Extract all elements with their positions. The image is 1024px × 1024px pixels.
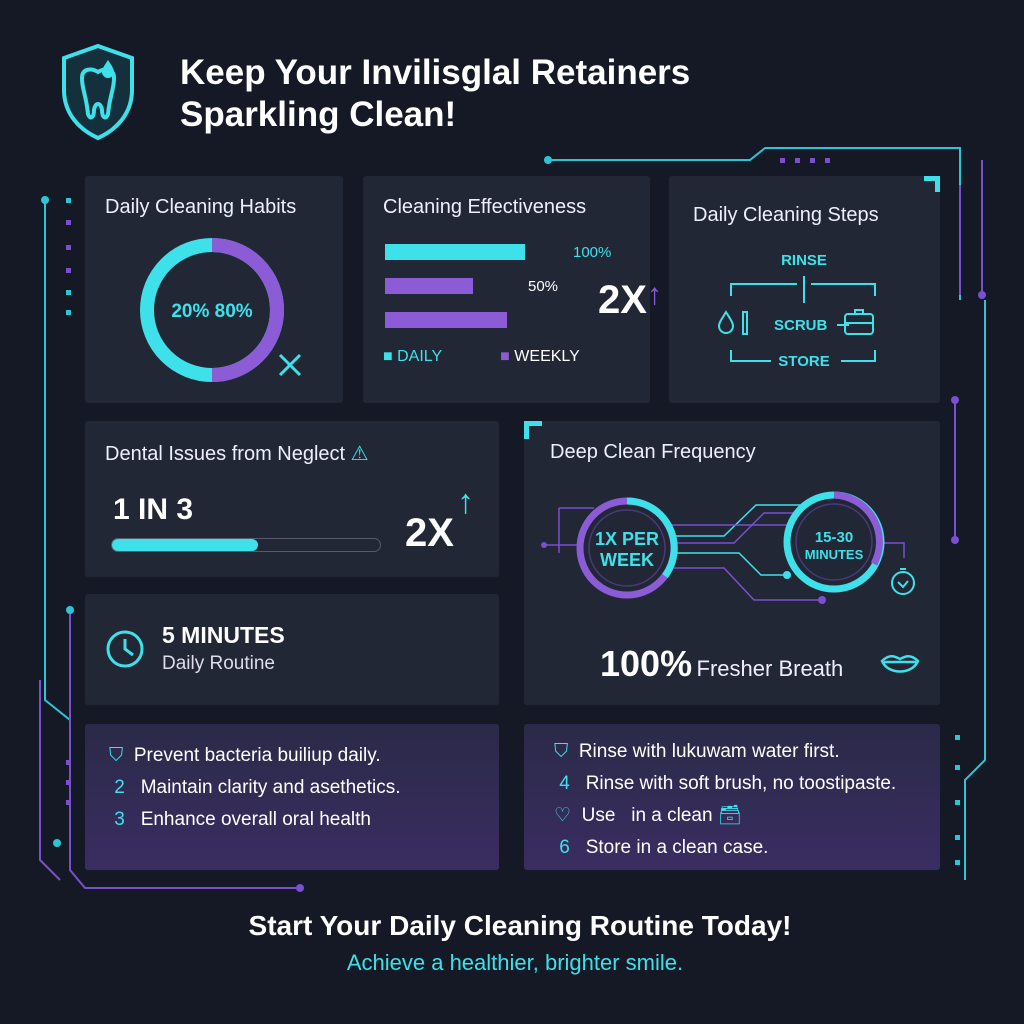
- footer headline: Start Your Daily Cleaning Routine Today!: [249, 910, 791, 941]
- panel: daily cleaning steps: Daily Cleaning Steps: [693, 204, 879, 226]
- panel: steps list: ⛉ Rinse with lukuwam water first.: [554, 741, 840, 762]
- panel: daily cleaning habits: [85, 176, 343, 403]
- donut chart: [140, 238, 284, 382]
- icon: shield tooth: [62, 44, 134, 140]
- rings chart: MINUTES: [805, 547, 864, 562]
- panel: benefits list: 3 Enhance overall oral health: [114, 809, 371, 830]
- panel: daily cleaning habits: Daily Cleaning Habits: [105, 196, 296, 218]
- bar chart: [385, 244, 611, 328]
- panel: dental issues: Dental Issues from Neglect ⚠: [105, 443, 369, 465]
- steps diagram: [718, 252, 876, 370]
- rings chart: [541, 492, 915, 604]
- panel: benefits list: 2 Maintain clarity and asethetics.: [114, 777, 400, 798]
- panel: cleaning effectiveness: Cleaning Effectiveness: [383, 196, 586, 218]
- icon: x: [279, 354, 301, 376]
- panel: steps list: ♡ Use in a clean 🗃: [554, 805, 742, 826]
- panel: benefits list: [85, 724, 499, 870]
- panel: 5 minutes: 5 MINUTES: [162, 622, 285, 648]
- footer subline: Achieve a healthier, brighter smile.: [347, 950, 683, 975]
- title: [180, 53, 690, 134]
- 2x stat: 2X↑: [598, 278, 662, 322]
- panel: 5 minutes: Daily Routine: [162, 653, 275, 674]
- arrow up: ↑: [457, 483, 474, 521]
- panel: steps list: [524, 724, 940, 870]
- donut chart: 20% 80%: [171, 301, 253, 322]
- title: Sparkling Clean!: [180, 95, 456, 134]
- rings chart: 15-30: [815, 529, 853, 546]
- panel: dental issues: 1 IN 3: [113, 493, 193, 526]
- panel: dental issues: 2X: [405, 511, 454, 555]
- panel: deep clean frequency: [524, 421, 940, 705]
- panel: cleaning effectiveness: [363, 176, 650, 403]
- icon: clock: [106, 630, 144, 668]
- panel: deep clean frequency: Deep Clean Frequency: [550, 441, 756, 463]
- icon: lips: [880, 655, 920, 673]
- bar chart: 50%: [528, 278, 558, 295]
- steps diagram: SCRUB: [774, 317, 828, 334]
- rings chart: 1X PER: [595, 529, 659, 549]
- panel: steps list: 6 Store in a clean case.: [559, 837, 768, 858]
- progress bar: [111, 538, 381, 552]
- bar chart: 100%: [573, 244, 611, 261]
- panel: 5 minutes: [85, 594, 499, 705]
- panel: daily cleaning steps: [669, 176, 940, 403]
- panel: dental issues: [85, 421, 499, 577]
- rings chart: WEEK: [600, 550, 654, 570]
- steps diagram: STORE: [778, 353, 830, 370]
- panel: benefits list: ⛉ Prevent bacteria builiup daily.: [109, 745, 381, 766]
- stat: fresher breath: 100% Fresher Breath: [600, 643, 843, 684]
- panel: steps list: 4 Rinse with soft brush, no toostipaste.: [559, 773, 896, 794]
- steps diagram: RINSE: [781, 252, 827, 269]
- legend: ■ DAILY ■ WEEKLY: [383, 348, 580, 365]
- title: Keep Your Invilisglal Retainers: [180, 53, 690, 92]
